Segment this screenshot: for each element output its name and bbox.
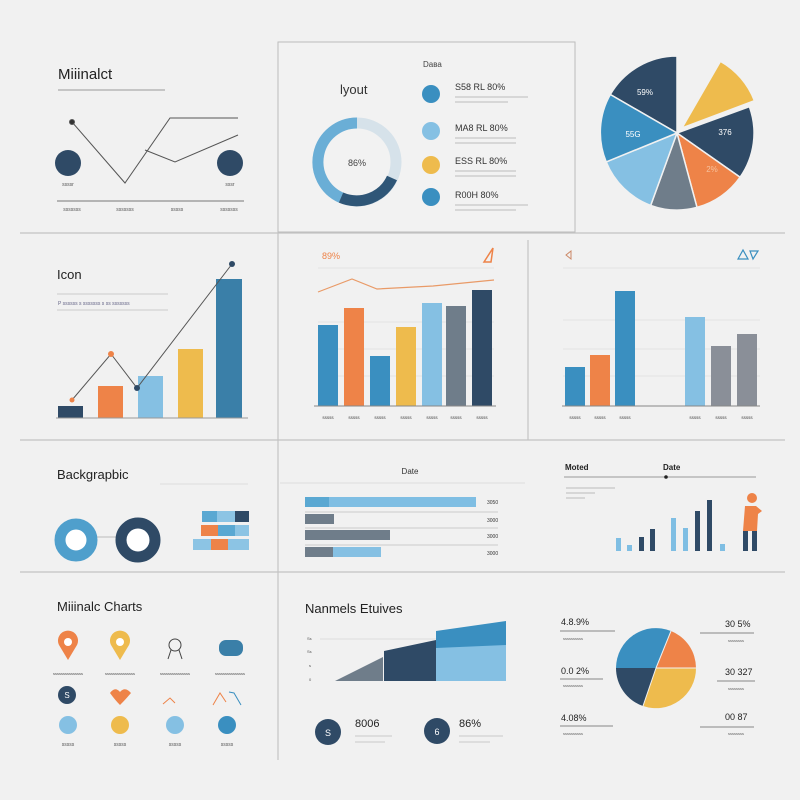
panel: top-right pie chart: 376 — [718, 128, 732, 137]
panel: bottom-middle area chart: Ss — [307, 649, 312, 654]
panel: middle-center bar chart: sssss — [476, 415, 488, 420]
panel: middle-right bar chart: sssss — [619, 415, 631, 420]
panel: bottom-left icon grid: sssss — [62, 742, 75, 748]
icon: blue blob — [219, 640, 243, 656]
panel: bottom-right pie with labels: ssssssssss — [563, 731, 583, 736]
panel: middle-right bar chart: sssss — [689, 415, 701, 420]
panel: row3 middle horizontal bars: 3000 — [487, 534, 498, 540]
panel: middle-right bar chart: sssss — [569, 415, 581, 420]
panel: bottom-right pie with labels: 30 5% — [725, 619, 751, 629]
panel: top-left line chart: sssr — [225, 182, 235, 188]
panel: row3 middle horizontal bars — [280, 467, 525, 557]
panel: row3 middle horizontal bars: Date — [402, 467, 419, 476]
panel: middle-center bar chart: sssss — [348, 415, 360, 420]
icon: blue ring — [60, 524, 92, 556]
panel: bottom-right pie with labels: ssssssss — [728, 686, 744, 691]
panel: bottom-middle area chart: s — [309, 663, 311, 668]
panel: bottom-left icon grid — [53, 599, 245, 748]
line chart — [70, 118, 238, 183]
panel: middle-center bar chart: sssss — [400, 415, 412, 420]
icon: orange pin — [58, 631, 78, 660]
panel: middle-center bar chart: sssss — [322, 415, 334, 420]
panel: bottom-right pie with labels: ssssssss — [728, 638, 744, 643]
panel: bottom-left icon grid: S — [64, 691, 70, 700]
panel: row3 middle horizontal bars: 3050 — [487, 500, 498, 506]
panel: bottom-right pie with labels: 4.08% — [561, 713, 587, 723]
donut chart — [318, 123, 396, 201]
legend list: MA8 RL 80% — [455, 123, 508, 133]
panel: top-left line chart: sssss — [171, 207, 184, 213]
panel: top-middle donut — [278, 42, 575, 232]
heading: Nanmels Etuives: Nanmels Etuives — [305, 601, 403, 616]
legend list: ESS RL 80% — [455, 156, 507, 166]
heading: Icon: Icon — [57, 267, 82, 282]
panel: middle-right bar chart — [562, 250, 760, 420]
panel: middle-center bar chart: sssss — [426, 415, 438, 420]
heading: Miiinalc Charts: Miiinalc Charts — [57, 599, 143, 614]
panel: bottom-left icon grid: sssss — [114, 742, 127, 748]
panel: bottom-middle area chart — [305, 601, 506, 745]
legend list — [422, 82, 528, 210]
panel: middle-center bar chart: sssss — [374, 415, 386, 420]
panel: top-right pie chart: 59% — [637, 88, 653, 97]
panel: bottom-middle area chart: 86% — [459, 718, 481, 730]
heading: lyout: lyout — [340, 82, 368, 97]
panel: middle-right bar chart: sssss — [715, 415, 727, 420]
panel: bottom-left icon grid: sssss — [221, 742, 234, 748]
panel: middle-center bar chart: 89% — [322, 251, 340, 261]
panel: bottom-right pie with labels: 00 87 — [725, 712, 748, 722]
panel: row3 middle horizontal bars: 3000 — [487, 518, 498, 524]
icon: orange arrow — [484, 248, 493, 262]
panel: bottom-right pie with labels: 4.8.9% — [561, 617, 589, 627]
panel: bottom-left icon grid: sssssssssssssss — [105, 671, 135, 676]
panel: bottom-right pie with labels: ssssssssss — [563, 636, 583, 641]
panel: bottom-middle area chart: Ss — [307, 636, 312, 641]
panel: top-left line chart: ssssr — [62, 182, 74, 188]
icon: navy ring — [121, 523, 155, 557]
heading: Backgrapbic: Backgrapbic — [57, 467, 129, 482]
panel: bottom-middle area chart: 8006 — [355, 718, 379, 730]
panel: middle-left bar+line chart: P ssssss s sssssss s ss sssssss — [58, 301, 130, 307]
panel: bottom-right pie with labels — [560, 617, 755, 736]
panel: row3 right bars with person: Moted — [565, 463, 589, 472]
legend list: S58 RL 80% — [455, 82, 505, 92]
icon: navy circle left — [55, 150, 81, 176]
panel: middle-right bar chart: sssss — [741, 415, 753, 420]
icon: outline — [169, 639, 181, 651]
panel: top-right pie chart: 55G — [625, 130, 641, 139]
panel: bottom-left icon grid: sssssssssssssss — [160, 671, 190, 676]
panel: middle-left bar+line chart — [56, 261, 248, 418]
panel: top-left line chart: sssssss — [116, 207, 134, 213]
panel: row3 middle horizontal bars: 3000 — [487, 551, 498, 557]
panel: bottom-left icon grid: sssssssssssssss — [53, 671, 83, 676]
icon: person — [743, 493, 762, 551]
panel: bottom-middle area chart: S — [325, 728, 331, 738]
panel: bottom-middle area chart: 6 — [434, 727, 440, 737]
panel: row3 left — [57, 467, 249, 557]
panel: bottom-middle area chart: 0 — [309, 677, 312, 682]
panel: top-left line chart — [55, 66, 244, 213]
panel: middle-right bar chart: sssss — [594, 415, 606, 420]
panel: top-left line chart: sssssss — [63, 207, 81, 213]
panel: top-right pie chart: 2% — [706, 165, 718, 174]
panel: bottom-left icon grid: sssss — [169, 742, 182, 748]
panel: row3 right bars with person — [564, 463, 762, 551]
panel: bottom-right pie with labels: 0.0 2% — [561, 666, 589, 676]
panel: top-middle donut: Dава — [423, 60, 442, 69]
panel: top-left line chart: sssssss — [220, 207, 238, 213]
heading: Miiinalct: Miiinalct — [58, 66, 113, 83]
panel: bottom-left icon grid: sssssssssssssss — [215, 671, 245, 676]
donut chart: 86% — [348, 158, 366, 168]
panel: middle-center bar chart — [314, 248, 496, 420]
icon: yellow pin — [110, 631, 130, 660]
panel: bottom-right pie with labels: ssssssssss — [563, 683, 583, 688]
icon: navy circle right — [217, 150, 243, 176]
panel: row3 right bars with person: Date — [663, 463, 681, 472]
panel: middle-center bar chart: sssss — [450, 415, 462, 420]
panel: bottom-right pie with labels: 30 327 — [725, 667, 753, 677]
panel: bottom-right pie with labels: ssssssss — [728, 731, 744, 736]
panel: top-right pie chart — [600, 56, 754, 210]
legend list: R00H 80% — [455, 190, 499, 200]
